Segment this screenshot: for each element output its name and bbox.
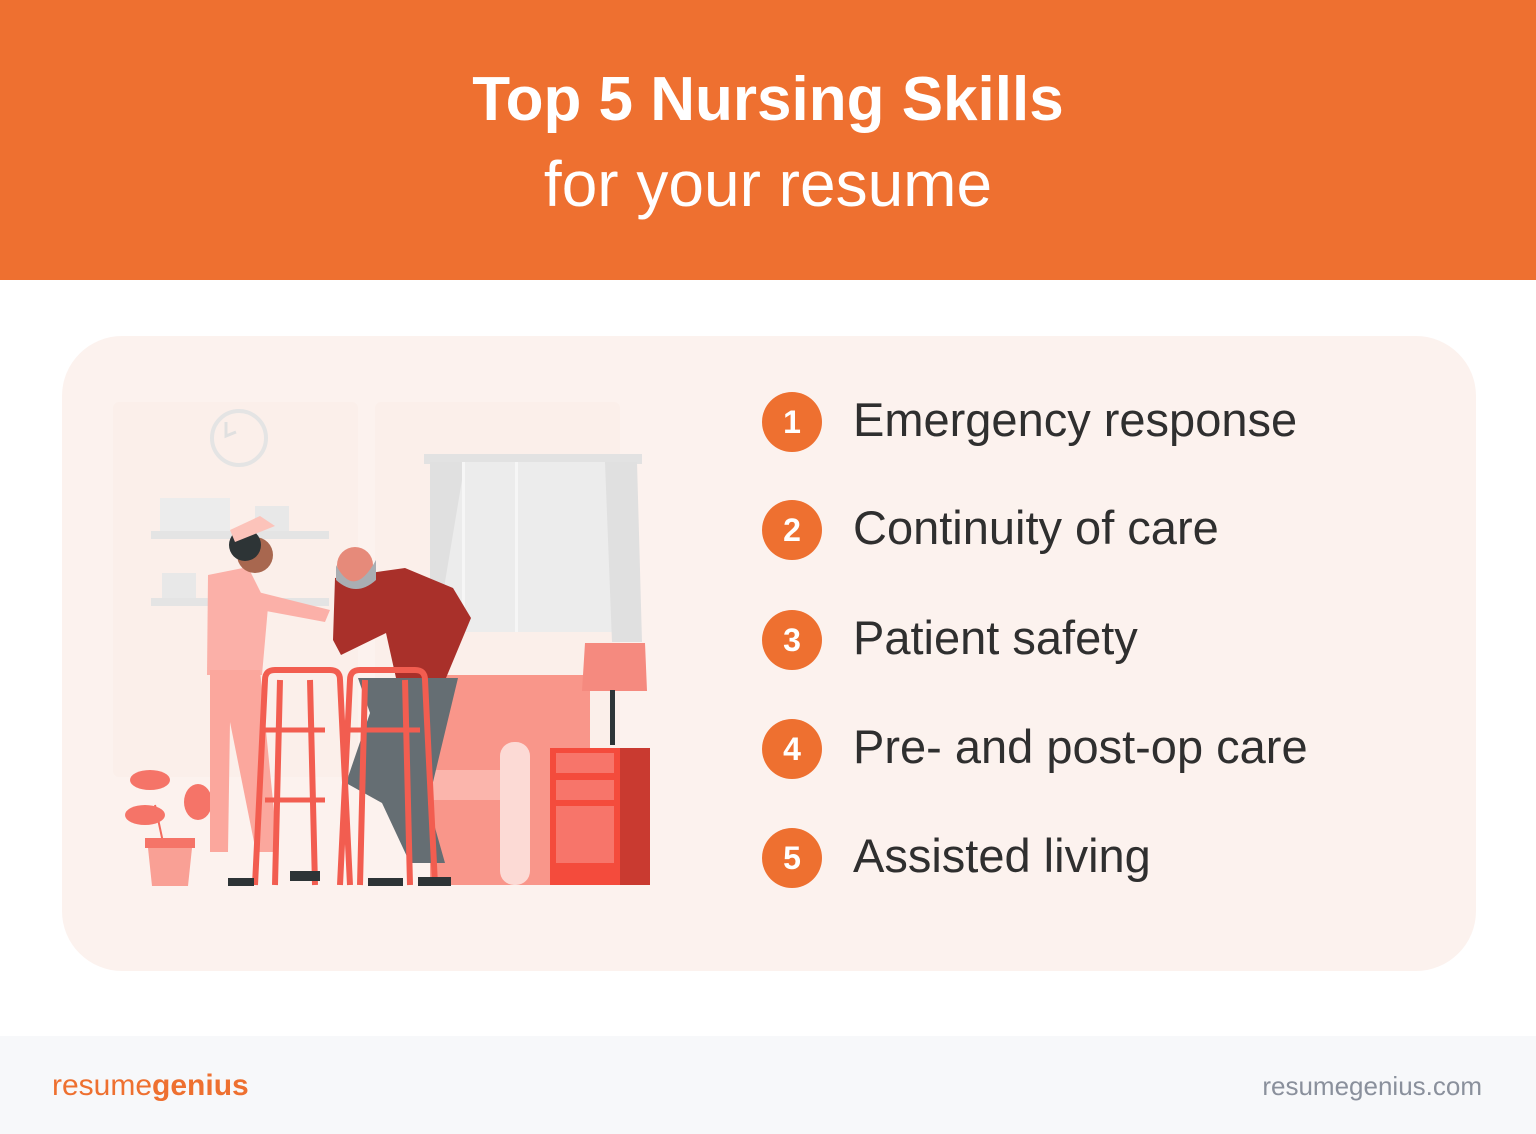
item 4: Pre- and post-op care	[853, 720, 1308, 773]
url: resumegenius.com	[1262, 1071, 1482, 1101]
illustration: nurse helping elderly patient	[125, 409, 650, 886]
item 1: 1	[783, 404, 801, 440]
panel: skills	[62, 336, 1476, 971]
item 4: 4	[783, 731, 801, 767]
item 2: 2	[783, 512, 801, 548]
item 2: Continuity of care	[853, 501, 1219, 554]
subtitle: for your resume	[544, 148, 992, 220]
item 5: 5	[783, 840, 801, 876]
item 5: Assisted living	[853, 829, 1151, 882]
item 5	[762, 828, 1151, 888]
item 3: 3	[783, 622, 801, 658]
logo: resumegenius	[52, 1069, 249, 1102]
item 1: Emergency response	[853, 393, 1297, 446]
item 3: Patient safety	[853, 611, 1138, 664]
item 3	[762, 610, 1138, 670]
footer	[0, 1036, 1536, 1134]
header	[0, 0, 1536, 280]
title: Top 5 Nursing Skills	[472, 65, 1064, 134]
